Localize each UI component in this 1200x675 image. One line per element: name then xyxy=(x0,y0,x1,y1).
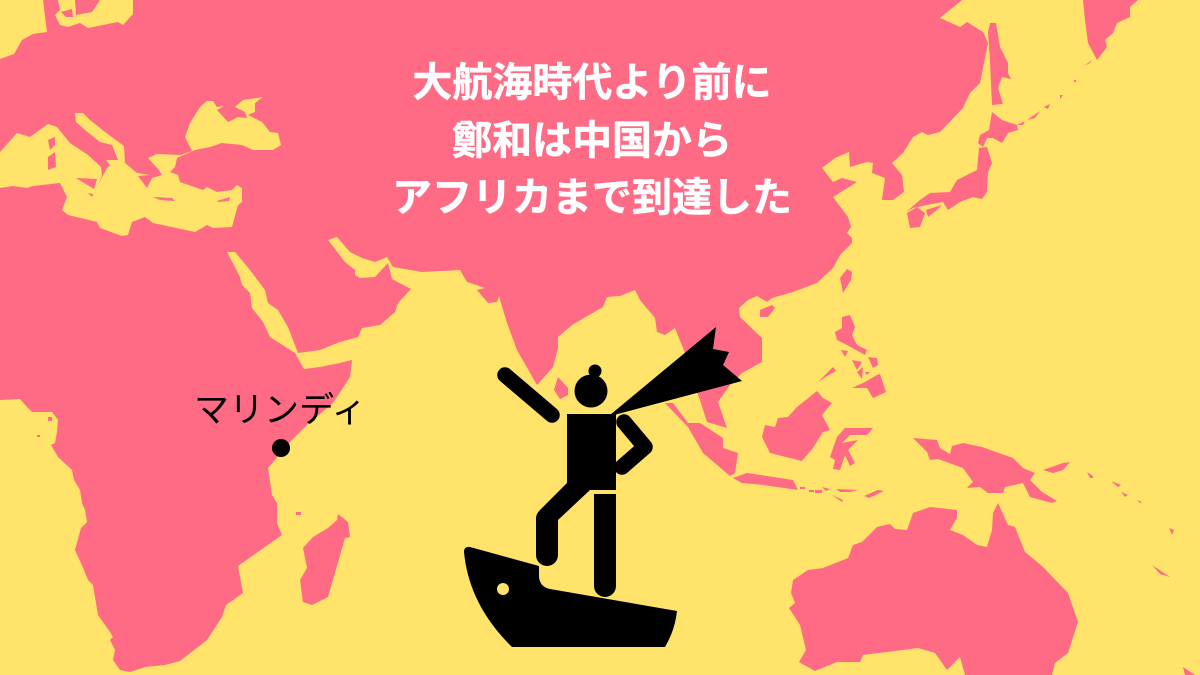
island: Sumatra xyxy=(665,403,738,476)
hair bun xyxy=(588,364,602,378)
islands: Japan xyxy=(906,112,1018,228)
head xyxy=(574,374,608,408)
islands: Philippines xyxy=(818,315,886,398)
title xyxy=(392,61,792,220)
island: New Guinea xyxy=(913,438,1057,503)
sea: Baltic xyxy=(55,0,133,28)
sea: Mediterranean and Black Sea xyxy=(0,97,281,236)
boat porthole xyxy=(497,583,509,595)
title: 大航海時代より前に xyxy=(412,61,772,105)
islands: Java and Lesser Sunda xyxy=(733,473,884,502)
island: Sakhalin xyxy=(988,23,1011,105)
landmass: Australia xyxy=(789,503,1078,675)
island: Sulawesi xyxy=(830,428,873,470)
island: Borneo xyxy=(762,391,832,461)
torn flag xyxy=(610,327,742,415)
island: Madagascar xyxy=(300,514,350,605)
figure: Zheng He on boat xyxy=(464,327,742,647)
bent leg xyxy=(536,483,590,566)
island: Kamchatka xyxy=(1083,0,1138,60)
raised arm xyxy=(505,375,552,415)
island: Sri Lanka xyxy=(554,377,568,399)
boat xyxy=(464,547,677,647)
marker: Malindi xyxy=(272,439,290,457)
island: Hainan xyxy=(760,305,775,317)
torso xyxy=(567,414,616,490)
title: 鄭和は中国から xyxy=(452,118,732,162)
title: アフリカまで到達した xyxy=(392,176,792,220)
arm on hip xyxy=(622,422,645,467)
label: Malindi: マリンディ xyxy=(194,391,367,430)
islands: Pacific xyxy=(1043,462,1195,675)
straight leg xyxy=(594,494,616,597)
islands: Mediterranean xyxy=(48,9,230,202)
island: Taiwan xyxy=(840,269,852,293)
islands: Gulf of Guinea and Comoros xyxy=(37,417,301,515)
islands: Kurils xyxy=(1017,60,1092,125)
